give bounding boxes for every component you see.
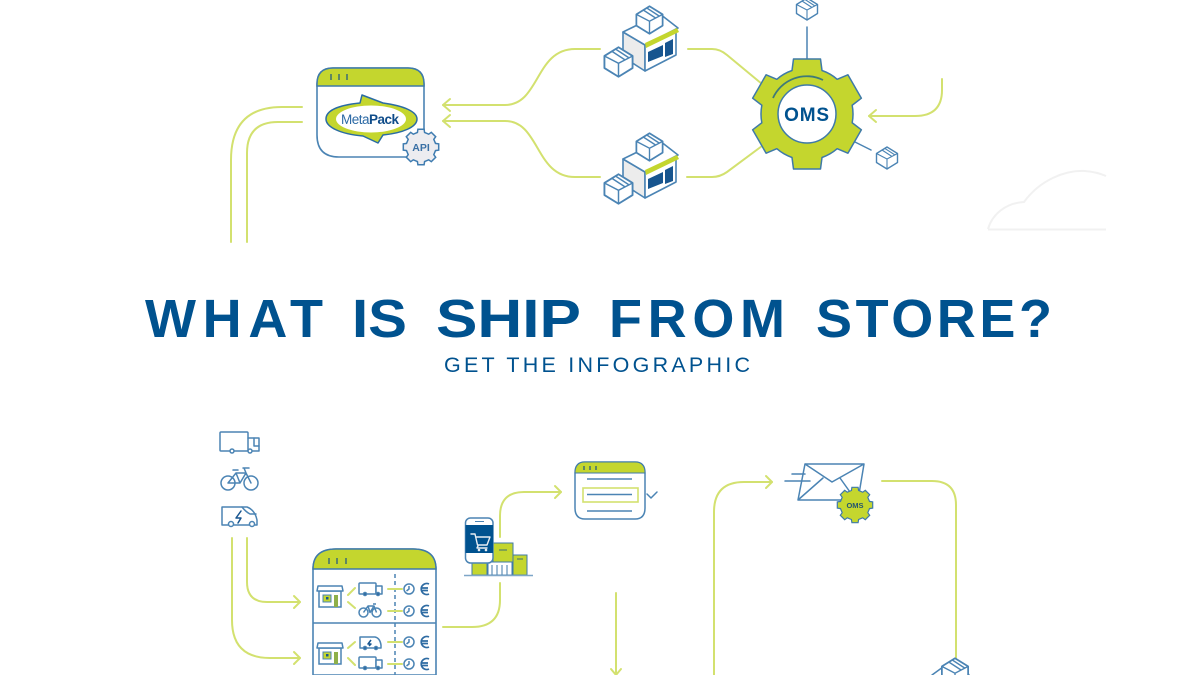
icon: phone with cart and shops: [464, 518, 533, 576]
title: FROM: [609, 289, 785, 349]
icon: truck row 4: [359, 657, 382, 670]
title: [145, 289, 1052, 349]
connector: window to shop: [443, 583, 500, 627]
icon: store with parcels (bottom): [604, 133, 679, 204]
logo: MetaPack: MetaPack: [341, 112, 400, 127]
icon: time and cost row 2: [404, 606, 429, 616]
window: delivery options: [313, 549, 436, 675]
connector: left outer and inner lines from MetaPack: [231, 107, 302, 242]
top diagram: [231, 0, 1106, 242]
icon: van row 3: [360, 637, 381, 650]
icon: time and cost row 4: [404, 658, 429, 670]
title: IS: [352, 289, 407, 349]
icon: electric van: [222, 507, 257, 526]
connectors: parcels to OMS gear: [807, 27, 871, 150]
icon: OMS gear: OMS: [784, 105, 830, 126]
window: order form: [575, 462, 657, 519]
icon: email with OMS gear: OMS: [846, 501, 864, 510]
icon: bike row 2: [359, 604, 381, 617]
icon: truck row 1: [359, 583, 382, 596]
connectors: vehicles to delivery options window: [232, 538, 300, 664]
connector: shop to order form: [500, 486, 561, 537]
icon: store with parcels (top): [604, 6, 679, 77]
connector: form downward arrow: [611, 593, 621, 675]
icon: email with OMS gear: [785, 464, 873, 523]
icon: OMS gear: [753, 59, 861, 169]
window: MetaPack API: [317, 68, 439, 165]
connectors: stores to OMS gear: [687, 49, 762, 177]
icon: store row 2: [317, 643, 343, 664]
subtitle: GET THE INFOGRAPHIC: [444, 353, 750, 377]
title: SHIP: [436, 289, 581, 349]
icon: parcel above OMS: [796, 0, 818, 20]
connector: upward line to email: [714, 476, 772, 675]
title: WHAT: [145, 289, 323, 349]
connectors: stores to MetaPack with arrows: [443, 49, 600, 177]
icon: API gear: API: [412, 142, 430, 154]
option row ticks: [348, 588, 402, 665]
bottom diagram: [220, 432, 969, 675]
cloud outline: [988, 171, 1106, 230]
icon: time and cost row 3: [404, 636, 429, 648]
icon: delivery truck: [220, 432, 259, 453]
connector: email to store: [882, 481, 956, 658]
icon: store row 1: [317, 586, 343, 607]
icon: time and cost row 1: [404, 584, 429, 594]
icon: store partly cut off at bottom: [932, 658, 969, 675]
icon: bicycle: [221, 468, 258, 490]
icon: parcel lower right of OMS: [876, 147, 898, 169]
title: STORE?: [816, 289, 1052, 349]
connector: arrow into OMS from right: [869, 79, 942, 122]
